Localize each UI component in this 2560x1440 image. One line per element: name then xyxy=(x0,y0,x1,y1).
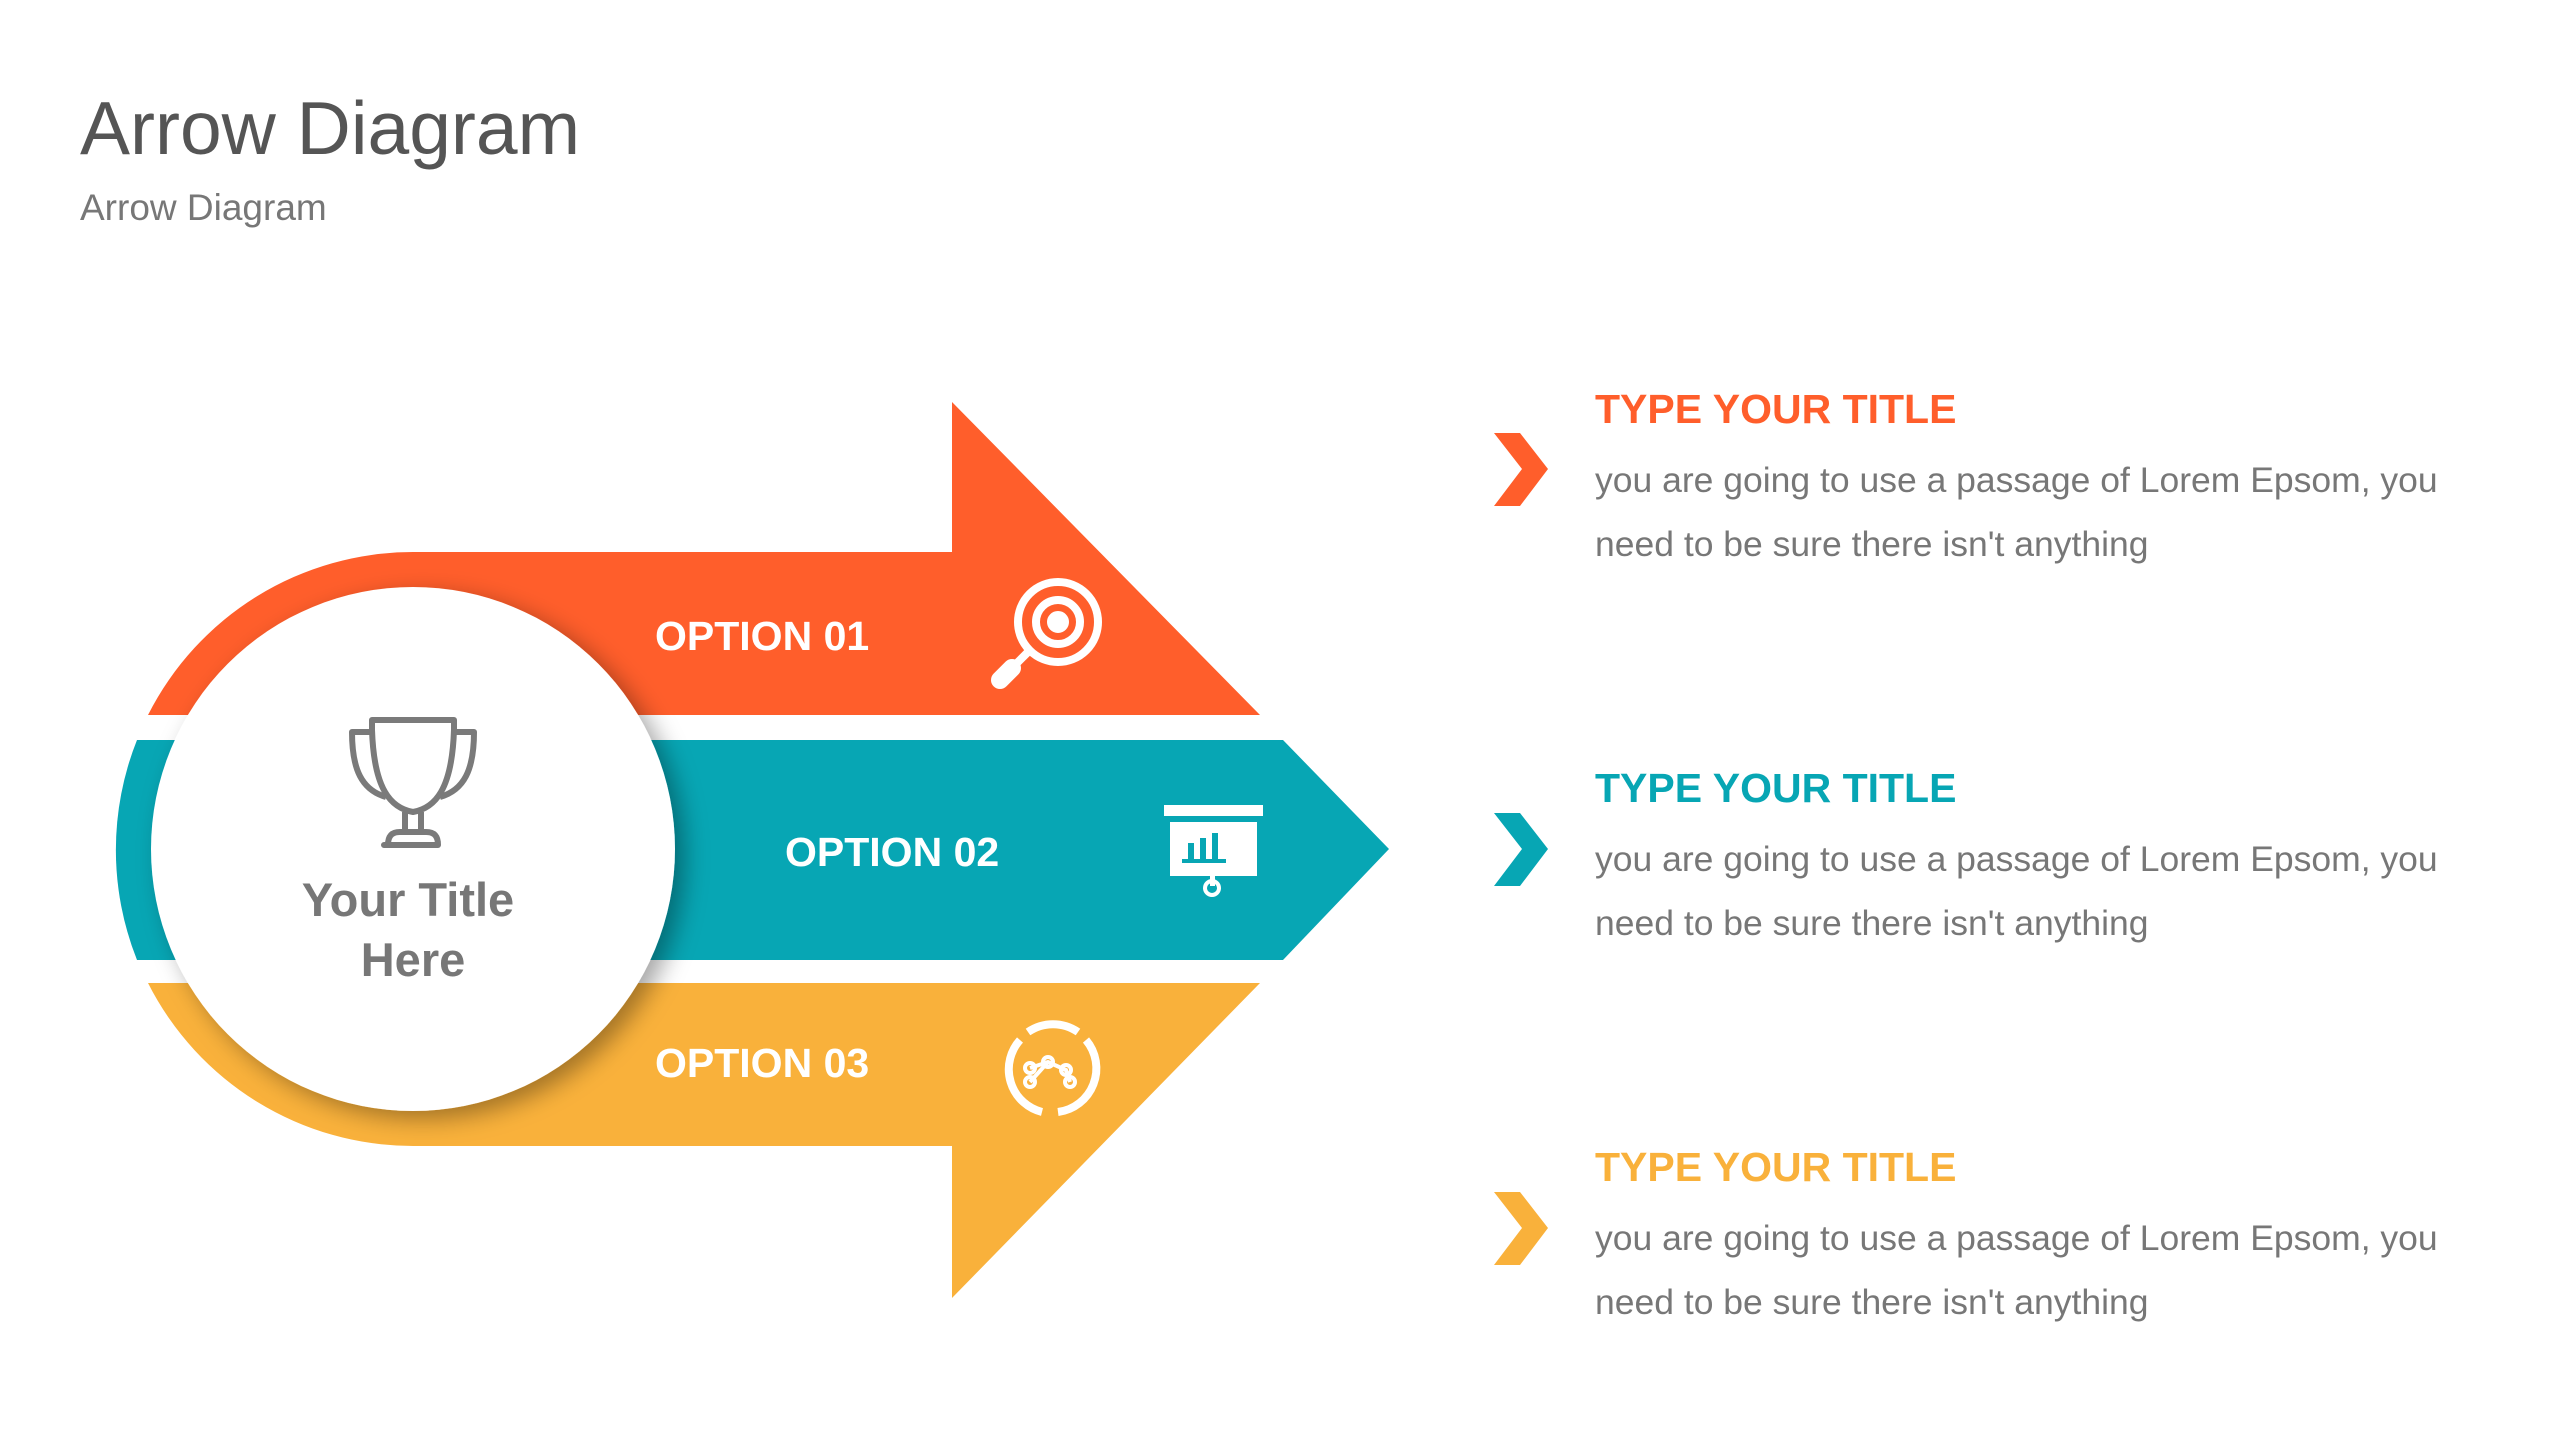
text block 3: need to be sure there isn't anything xyxy=(1595,1282,2148,1322)
text block 2: you are going to use a passage of Lorem Epsom, you xyxy=(1595,839,2438,879)
text block 1: TYPE YOUR TITLE xyxy=(1595,386,1956,432)
icon: cycle network xyxy=(1009,1024,1096,1112)
center circle: Here xyxy=(361,933,465,986)
text block 3: TYPE YOUR TITLE xyxy=(1595,1144,1956,1190)
text block 2 xyxy=(1595,765,2438,943)
arrow: option 03 xyxy=(148,983,1260,1298)
text block 2: TYPE YOUR TITLE xyxy=(1595,765,1956,811)
arrow: option 02: OPTION 02 xyxy=(785,829,999,875)
icon: magnifier eye xyxy=(1000,582,1098,680)
arrow: option 01: OPTION 01 xyxy=(655,613,869,659)
arrow: option 02 xyxy=(116,740,1389,960)
text block 2: need to be sure there isn't anything xyxy=(1595,903,2148,943)
text block 3: you are going to use a passage of Lorem Epsom, you xyxy=(1595,1218,2438,1258)
text block 1: you are going to use a passage of Lorem Epsom, you xyxy=(1595,460,2438,500)
arrow: option 01 xyxy=(148,402,1260,715)
arrow: option 03: OPTION 03 xyxy=(655,1040,869,1086)
chevron icons xyxy=(1494,433,1548,1265)
subtitle: Arrow Diagram xyxy=(80,187,327,228)
text block 1 xyxy=(1595,386,2438,564)
title: Arrow Diagram xyxy=(80,86,580,170)
icon: presentation chart xyxy=(1164,805,1263,895)
center circle xyxy=(151,587,675,1111)
icon: trophy xyxy=(352,720,474,845)
text block 3 xyxy=(1595,1144,2438,1322)
text block 1: need to be sure there isn't anything xyxy=(1595,524,2148,564)
center circle: Your Title xyxy=(302,873,514,926)
